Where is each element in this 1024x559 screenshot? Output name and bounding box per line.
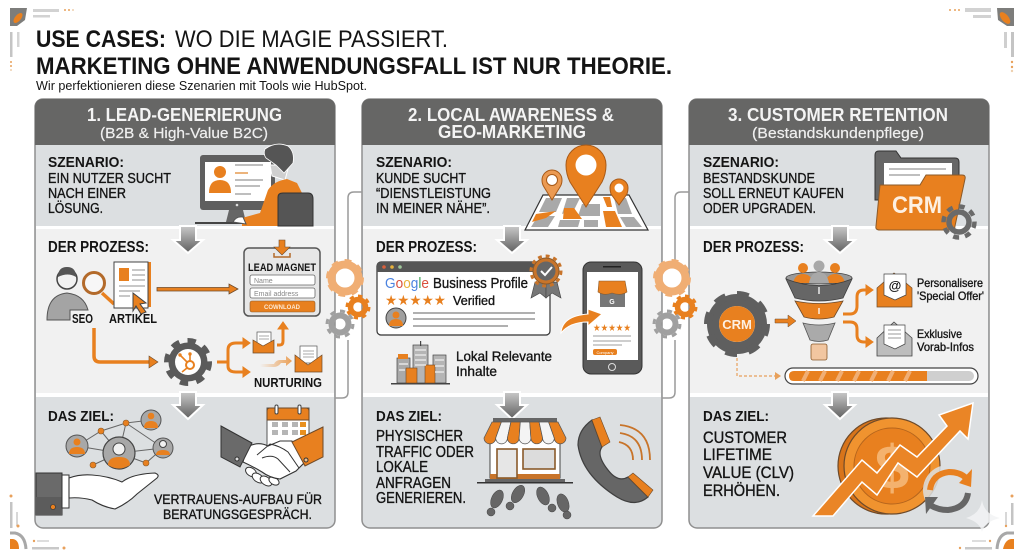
arrow: up from envelope xyxy=(277,322,288,345)
panel 3 scenario text xyxy=(703,154,844,217)
panel 3 goal text xyxy=(703,408,794,500)
label: exclusive previews: Vorab-Infos xyxy=(917,340,974,354)
arrow: dashed CRM to progress xyxy=(737,358,781,380)
panel 1 process heading: DER PROZESS: xyxy=(48,239,149,256)
lead magnet form: Email address xyxy=(254,291,299,298)
arrow: process to goal xyxy=(497,392,527,419)
panel 1 scenario text xyxy=(48,154,171,217)
arrow: process to goal xyxy=(173,392,203,419)
connector lines and gears between panel 1 and 2 xyxy=(327,192,369,398)
icon: special offer envelope: @ xyxy=(889,278,901,293)
title: WO DIE MAGIE PASSIERT. xyxy=(175,26,448,53)
icon: recycle arrows xyxy=(923,465,973,515)
panel 1 heading xyxy=(87,104,282,142)
panel 2 scenario text: KUNDE SUCHT xyxy=(376,170,466,187)
icon: SEO person with magnifier xyxy=(47,267,114,320)
corner decoration: top right xyxy=(949,8,1014,72)
panel 1: lead generation xyxy=(35,99,335,528)
panel 1 heading: 1. LEAD-GENERIERUNG xyxy=(87,104,282,125)
title: MARKETING OHNE ANWENDUNGSFALL IST NUR THEORIE. xyxy=(36,53,672,80)
panel 3 scenario text: SZENARIO: xyxy=(703,154,779,171)
panel 2 goal text: DAS ZIEL: xyxy=(376,408,442,425)
icon: CRM folder with gear xyxy=(875,151,974,238)
panel 3 scenario text: BESTANDSKUNDE xyxy=(703,170,815,187)
lead magnet form: LEAD MAGNET xyxy=(248,262,316,274)
panel 2: local awareness xyxy=(362,99,662,528)
label: locally relevant content: Lokal Relevante xyxy=(456,348,552,364)
title: USE CASES: xyxy=(36,26,166,53)
icon: map with location pins xyxy=(525,145,648,230)
panel 3 process heading: DER PROZESS: xyxy=(703,239,804,256)
panel 2 heading: 2. LOCAL AWARENESS & xyxy=(408,104,614,125)
panel 2 goal text: LOKALE xyxy=(376,459,428,476)
lead magnet form xyxy=(244,240,320,316)
icon: storefront xyxy=(477,418,573,484)
panel 1 goal heading: DAS ZIEL: xyxy=(48,408,114,425)
google business profile card: Verified xyxy=(453,293,495,308)
labels: SEO and article: SEO xyxy=(72,311,93,326)
arrows: funnel to emails xyxy=(843,285,873,347)
icon: city buildings xyxy=(391,341,450,384)
panel 2 goal text: TRAFFIC ODER xyxy=(376,444,474,461)
panel 2 goal text: ANFRAGEN xyxy=(376,475,451,492)
panel 3: customer retention xyxy=(689,99,1000,532)
panel 1 goal text: BERATUNGSGESPRÄCH. xyxy=(163,506,312,522)
panel 1 scenario text: SZENARIO: xyxy=(48,154,124,171)
subtitle: Wir perfektionieren diese Szenarien mit Tools wie HubSpot. xyxy=(36,79,367,93)
panel 3 goal text: CUSTOMER xyxy=(703,428,787,447)
lead magnet form: COWNLOAD xyxy=(264,304,300,311)
panel 3 scenario text: SOLL ERNEUT KAUFEN xyxy=(703,185,844,202)
connector lines and gears between panel 2 and 3 xyxy=(654,192,696,398)
arrows: split to emails xyxy=(217,338,250,377)
arrow: card to phone xyxy=(561,309,602,333)
label: locally relevant content: Inhalte xyxy=(456,363,497,379)
label: personalised offer: 'Special Offer' xyxy=(917,289,984,303)
panel 2 goal text: PHYSISCHER xyxy=(376,428,463,445)
icon: footprints xyxy=(487,483,571,519)
icon: CRM folder with gear: CRM xyxy=(892,192,942,219)
icon: coin xyxy=(838,418,940,514)
panel 2 scenario text xyxy=(376,154,491,217)
arrow: article to lead magnet xyxy=(157,284,238,294)
arrow: scenario to process xyxy=(173,226,203,253)
icon: large envelope xyxy=(295,346,322,372)
icon: smartphone with store: ★★★★★ xyxy=(593,323,631,334)
label: personalised offer xyxy=(917,276,984,303)
panel 1 heading: (B2B & High-Value B2C) xyxy=(100,125,268,142)
arrow: scenario to process xyxy=(825,226,855,253)
icon: coin: $ xyxy=(875,434,909,503)
icon: verified badge xyxy=(531,256,561,298)
google business profile card: ★★★★★ xyxy=(385,293,446,309)
arrow: process to goal xyxy=(825,392,855,419)
panel 1 scenario text: EIN NUTZER SUCHT xyxy=(48,170,171,187)
arrow: SEO to automation gear xyxy=(94,328,150,362)
icon: sparkle watermark xyxy=(966,500,1000,532)
icon: article document with cursor xyxy=(114,262,151,314)
label: exclusive previews xyxy=(917,327,974,354)
icon: CRM gear: CRM xyxy=(722,317,752,332)
icon: rising arrow xyxy=(813,403,973,516)
label: nurturing: NURTURING xyxy=(254,375,322,390)
panel 3 heading: (Bestandskundenpflege) xyxy=(752,125,924,142)
icon: smartphone with store: G xyxy=(609,299,615,306)
icon: handshake with calendar xyxy=(221,405,323,488)
panel 1 goal text: VERTRAUENS-AUFBAU FÜR xyxy=(154,490,322,507)
arrow: gear to funnel xyxy=(775,315,796,327)
corner decoration: bottom left xyxy=(10,494,66,550)
icon: exclusive info envelope xyxy=(877,322,912,356)
panel 2 scenario text: “DIENSTLEISTUNG xyxy=(376,185,491,202)
arrow: scenario to process xyxy=(497,226,527,253)
progress bar xyxy=(785,368,978,384)
title xyxy=(36,26,672,80)
arrow: faded to second envelope xyxy=(260,356,292,367)
panel 1 scenario text: NACH EINER xyxy=(48,185,126,202)
icon: special offer envelope xyxy=(877,273,912,307)
panel 2 goal text: GENERIEREN. xyxy=(376,490,466,507)
panel 3 goal text: DAS ZIEL: xyxy=(703,408,769,425)
corner decoration: bottom right xyxy=(959,494,1014,550)
panel 2 process heading: DER PROZESS: xyxy=(376,239,477,256)
panel 3 goal text: ERHÖHEN. xyxy=(703,481,780,500)
panel 3 goal text: VALUE (CLV) xyxy=(703,463,794,482)
google business profile card: Business Profile xyxy=(433,276,528,292)
panel 3 goal text: LIFETIME xyxy=(703,445,772,464)
icon: orange envelope xyxy=(253,332,274,353)
icon: telephone handset xyxy=(578,417,653,502)
google business profile card xyxy=(377,262,550,335)
icon: CRM gear xyxy=(708,295,766,353)
panel 2 heading xyxy=(408,104,614,142)
panel 3 heading: 3. CUSTOMER RETENTION xyxy=(728,104,948,125)
icon: smartphone with store xyxy=(583,262,642,374)
panel 1 goal text xyxy=(154,490,322,522)
panel 3 heading xyxy=(728,104,948,142)
panel 2 heading: GEO-MARKETING xyxy=(438,121,586,142)
panel 1 scenario text: LÖSUNG. xyxy=(48,199,103,217)
arrowhead: to automation gear xyxy=(149,356,158,368)
panel 2 goal text xyxy=(376,408,474,507)
panel 2 scenario text: SZENARIO: xyxy=(376,154,452,171)
panel 2 scenario text: IN MEINER NÄHE”. xyxy=(376,200,490,217)
icon: open hand xyxy=(36,473,158,515)
icon: person at computer xyxy=(195,144,313,226)
icon: smartphone with store: Company xyxy=(596,350,614,355)
google business profile card: Google xyxy=(385,276,429,292)
labels: SEO and article: ARTIKEL xyxy=(109,311,157,326)
icon: HubSpot gear xyxy=(167,341,209,383)
lead magnet form: Name xyxy=(254,278,273,285)
labels: SEO and article xyxy=(72,311,157,326)
icon: funnel with people xyxy=(786,260,852,360)
label: locally relevant content xyxy=(456,348,552,379)
label: personalised offer: Personalisere xyxy=(917,276,983,290)
panel 3 scenario text: ODER UPGRADEN. xyxy=(703,200,816,217)
icon: people network xyxy=(66,410,173,469)
label: exclusive previews: Exklusive xyxy=(917,327,962,341)
corner decoration: top left xyxy=(10,8,74,71)
